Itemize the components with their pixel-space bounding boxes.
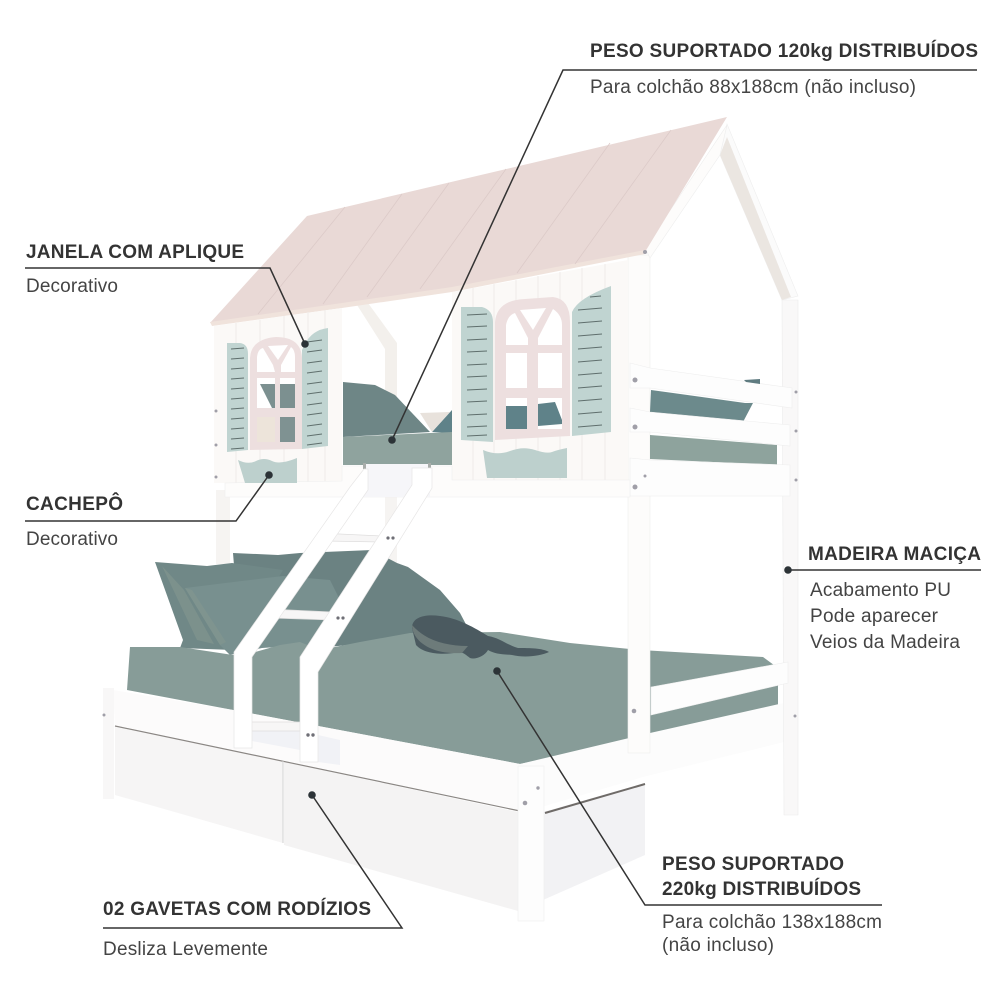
- callout: gavetas: 02 GAVETAS COM RODÍZIOS: [103, 898, 371, 920]
- callout: madeira maciça: Pode aparecer: [810, 606, 939, 627]
- ladder top panel: [362, 464, 430, 497]
- upper deck beam: [225, 466, 630, 497]
- left window panes: [257, 345, 295, 442]
- upper mattress and pillow in opening: [343, 382, 452, 465]
- callout: peso suportado 220kg: 220kg DISTRIBUÍDOS: [662, 878, 861, 900]
- callout: peso suportado 120kg: Para colchão 88x188cm (não incluso): [590, 77, 916, 98]
- upper guard rails: [630, 363, 792, 496]
- bolts: [102, 250, 798, 805]
- left cachepô: [238, 458, 297, 483]
- ladder bolts: [306, 536, 395, 737]
- upper back gable: [357, 303, 397, 425]
- callout: peso suportado 120kg: [388, 40, 978, 444]
- panel shading behind ladder: [252, 731, 340, 765]
- right side lower rail: [520, 702, 788, 812]
- pillow tip above rail: [744, 379, 760, 384]
- roof: [210, 117, 727, 326]
- back posts: [216, 490, 397, 565]
- callout: madeira maciça: MADEIRA MACIÇA: [808, 544, 981, 565]
- lower right post: [518, 766, 544, 921]
- right wall panel: [452, 260, 628, 480]
- left window shutters: [227, 328, 328, 452]
- right window frame: [495, 297, 570, 440]
- ladder: [234, 468, 432, 762]
- lower drawer right: [284, 762, 518, 911]
- middle post: [628, 255, 650, 753]
- front pillow: [185, 576, 345, 655]
- ladder rungs: [238, 533, 382, 731]
- callout: peso suportado 220kg: PESO SUPORTADO: [662, 854, 844, 875]
- lower front rail: [113, 690, 520, 810]
- lower left post: [103, 688, 114, 799]
- left wall panel: [214, 308, 342, 483]
- ladder left rail: [234, 469, 368, 748]
- left window frame: [250, 337, 302, 450]
- callout: peso suportado 220kg: (não incluso): [662, 935, 774, 956]
- pillow fold: [162, 566, 226, 645]
- right window: [461, 286, 611, 442]
- left window: [227, 328, 328, 452]
- ladder brackets: [363, 463, 431, 469]
- lower mattress: [127, 632, 778, 764]
- lower drawer left: [115, 727, 283, 843]
- callout: madeira maciça: Veios da Madeira: [810, 632, 960, 653]
- far post and gable: [645, 124, 798, 815]
- callout: peso suportado 220kg: Para colchão 138x188cm: [662, 912, 882, 933]
- callout: gavetas: Desliza Levemente: [103, 939, 268, 960]
- lower guard rail: [651, 662, 788, 715]
- callout: cachepô: [25, 471, 273, 550]
- ladder right rail: [300, 468, 432, 762]
- callout: janela com aplique: [25, 242, 309, 348]
- callout: peso suportado 120kg: PESO SUPORTADO 120kg DISTRIBUÍDOS: [590, 40, 978, 62]
- callout: cachepô: CACHEPÔ: [26, 493, 123, 515]
- drawer side: [543, 783, 645, 900]
- callout: janela com aplique: JANELA COM APLIQUE: [26, 242, 244, 263]
- lower pillows: [155, 550, 470, 655]
- left pillow: [155, 562, 283, 650]
- right window shutters: [461, 286, 611, 442]
- callout: cachepô: Decorativo: [26, 529, 118, 550]
- right cachepô: [483, 448, 567, 478]
- back pillows: [233, 550, 470, 650]
- callout: madeira maciça: [784, 544, 981, 653]
- callout: gavetas: [103, 791, 402, 960]
- upper right mattress: [650, 435, 777, 465]
- callout: madeira maciça: Acabamento PU: [810, 580, 951, 601]
- upper right pillow: [650, 390, 753, 422]
- callout: peso suportado 220kg: [493, 667, 882, 956]
- illustration: bunk bed: [102, 117, 798, 921]
- whale plush: [412, 615, 549, 659]
- callout: janela com aplique: Decorativo: [26, 276, 118, 297]
- right window panes: [506, 308, 562, 429]
